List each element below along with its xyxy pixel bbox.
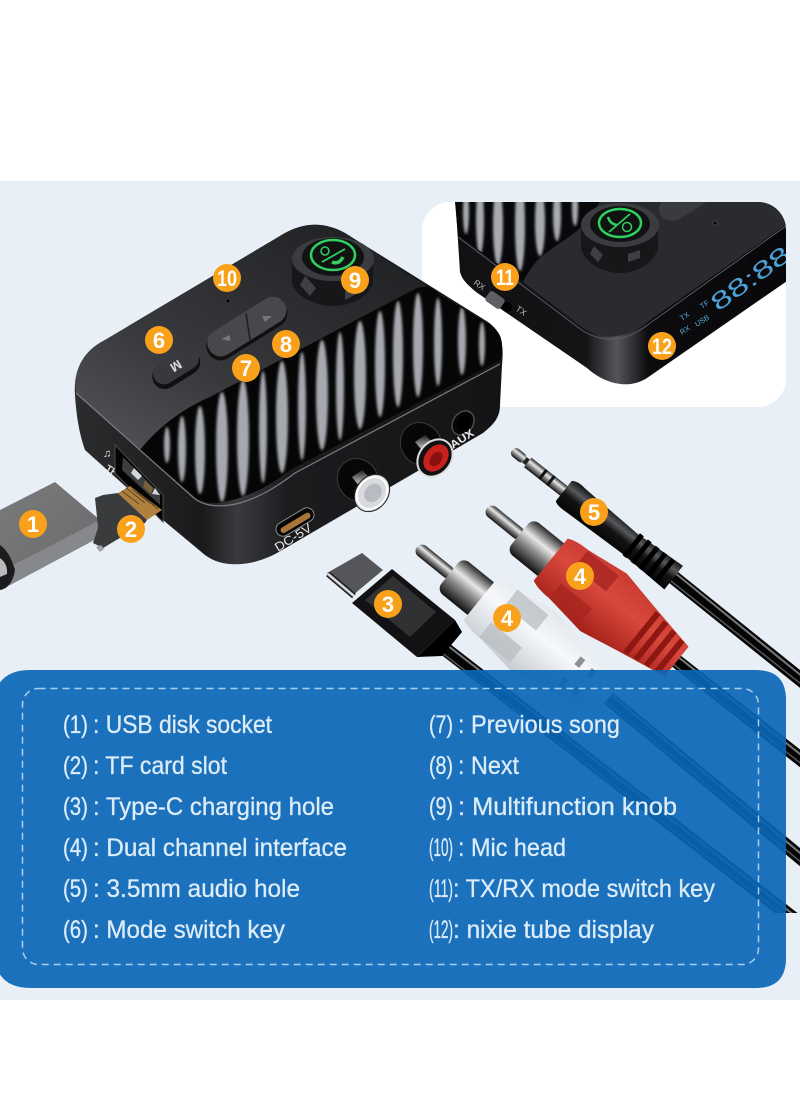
legend row 5: : 3.5mm audio hole (93, 875, 300, 903)
callout 5 (580, 498, 608, 526)
socket: USB port (115, 445, 163, 522)
socket: red RCA (392, 415, 460, 484)
callout 2 (117, 515, 145, 543)
legend row 10: (10) (429, 834, 453, 862)
page background (0, 181, 800, 1000)
callout 12: 12 (652, 334, 672, 359)
callout 3 (374, 590, 402, 618)
label: display indicators: TF (698, 298, 711, 311)
label: RX TX switch: RX (472, 277, 488, 293)
socket: Type-C port (273, 505, 317, 539)
label: RX TX switch (474, 280, 527, 316)
label: RX TX switch: TX (514, 303, 529, 318)
callout 1 (19, 510, 47, 538)
callout 2: 2 (125, 517, 137, 542)
callout 8 (272, 330, 300, 358)
callout 10: 10 (217, 266, 237, 291)
callout 9: 9 (349, 268, 361, 293)
callout 1: 1 (27, 512, 39, 537)
label: TF: TF (104, 463, 119, 478)
label: AUX: AUX (448, 427, 477, 452)
label: DC-5V: DC-5V (272, 521, 315, 555)
callout 3: 3 (382, 592, 394, 617)
icon: inset mic hole (713, 221, 717, 225)
socket: AUX jack (447, 407, 479, 439)
device body (75, 225, 503, 564)
callout 9 (341, 266, 369, 294)
legend row 1: (1) (63, 711, 88, 739)
top matte surface (76, 225, 440, 450)
callout 6: 6 (153, 328, 165, 353)
knob: multifunction (292, 237, 374, 306)
legend row 2: (2) (63, 752, 88, 780)
callout 4 white (493, 604, 521, 632)
legend row 10: : Mic head (458, 834, 566, 862)
TF card (93, 486, 162, 552)
button: inset next key (659, 202, 706, 220)
legend row 8: (8) (429, 752, 453, 780)
plug: Type-C (327, 553, 462, 657)
callout 11: 11 (496, 265, 514, 290)
legend row 7: : Previous song (458, 711, 620, 739)
dashed frame (22, 688, 758, 964)
plug: white RCA (394, 518, 630, 729)
panel: parts legend (0, 670, 786, 988)
legend row 8 (429, 752, 519, 780)
label: music note: ♫ (103, 448, 111, 460)
icon: inset knob (581, 203, 659, 273)
legend row 11: : TX/RX mode switch key (453, 875, 715, 903)
seam lines (76, 364, 500, 506)
legend row 5: (5) (63, 875, 88, 903)
callout 7 (232, 354, 260, 382)
button: mode switch key: M (167, 357, 185, 375)
legend row 6: (6) (63, 916, 88, 944)
callout 7: 7 (240, 356, 252, 381)
buttons: previous and next (201, 292, 293, 366)
plug: 3.5mm audio jack (503, 438, 683, 590)
label: display indicators: RX (678, 323, 692, 337)
legend row 6: : Mode switch key (93, 916, 285, 944)
legend row 12: : nixie tube display (453, 916, 654, 944)
socket: white RCA (329, 451, 397, 519)
callout 6 (145, 326, 173, 354)
legend row 11: (11) (429, 875, 453, 903)
USB drive (0, 482, 100, 590)
legend row 7: (7) (429, 711, 453, 739)
legend row 9: : Multifunction knob (458, 793, 677, 821)
button: mode switch key (148, 343, 205, 394)
legend row 2: : TF card slot (93, 752, 227, 780)
callout 4 red (566, 562, 594, 590)
legend row 9: (9) (429, 793, 453, 821)
icon: mic hole (226, 299, 230, 303)
label: display indicators: USB (693, 313, 711, 329)
nixie tube display digits: 88:88 (706, 241, 796, 317)
callout 5: 5 (588, 500, 600, 525)
label: display indicators (679, 300, 710, 335)
legend row 4: : Dual channel interface (93, 834, 347, 862)
legend row 12: (12) (429, 916, 453, 944)
cables (442, 572, 800, 913)
glossy ribbed surface (140, 287, 502, 503)
legend row 3: (3) (63, 793, 88, 821)
legend row 8: : Next (458, 752, 519, 780)
plug: red RCA (464, 479, 700, 690)
callout 4 red: 4 (574, 564, 587, 589)
legend row 3: : Type-C charging hole (93, 793, 334, 821)
legend row 4: (4) (63, 834, 88, 862)
label: display indicators: TX (678, 310, 691, 323)
callout 8: 8 (280, 332, 292, 357)
legend row 1: : USB disk socket (93, 711, 272, 739)
callout 4 white: 4 (501, 606, 514, 631)
panel: inset close-up of device (422, 202, 786, 407)
